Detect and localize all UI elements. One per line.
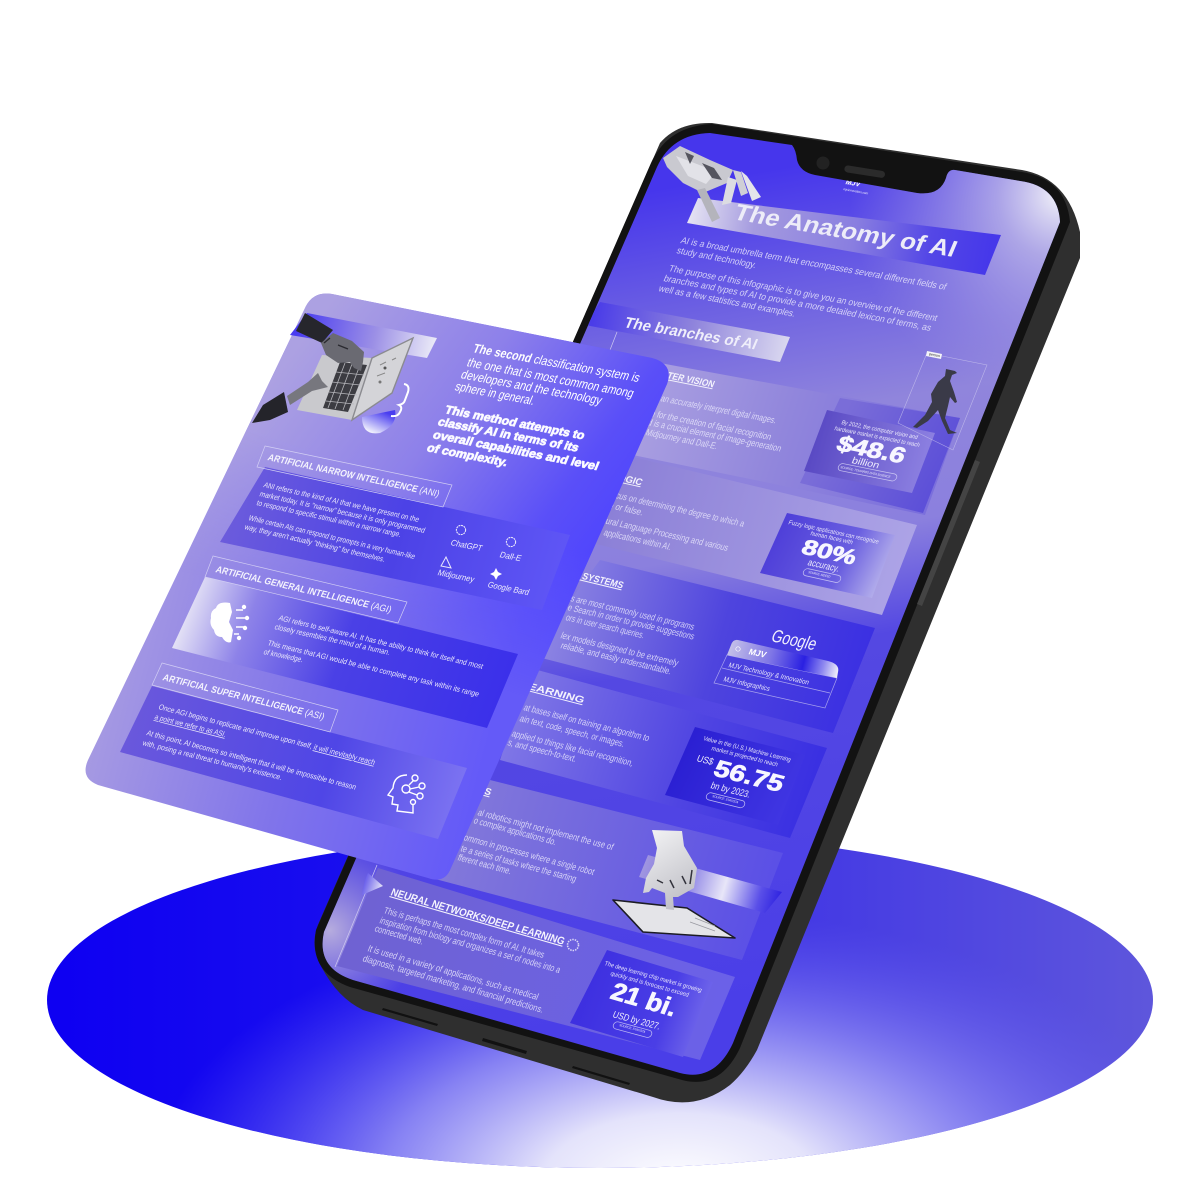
panel: machine learning: applied to things like facial recognition,: [510, 728, 635, 768]
panel: artificial general intelligence: [172, 556, 518, 728]
panel: artificial super intelligence: ARTIFICIAL SUPER INTELLIGENCE (ASI): [161, 672, 326, 723]
panel: expert systems: lex models designed to be extremely: [559, 630, 680, 668]
panel: computer vision: $48.6: [833, 431, 910, 468]
panel: machine learning: Value in the (U.S.) Machine Learning: [702, 735, 792, 764]
icon: Dall-E: Dall-E: [498, 549, 524, 563]
panel: computer vision: an accurately interpret digital images.: [659, 393, 778, 425]
panel: expert systems: [530, 560, 875, 733]
panel: machine learning: market is projected to reach: [710, 745, 780, 769]
panel: computer vision: hardware market is expected to reach: [833, 425, 921, 449]
laptop banner: [290, 313, 437, 358]
panel: fuzzy logic: applications within AI.: [602, 527, 673, 552]
icon: Midjourney: [436, 557, 477, 584]
logo under notch: [843, 180, 868, 194]
title banner: [687, 198, 1001, 275]
icon: brain circuit: [210, 603, 249, 642]
branches banner: The branches of AI: [621, 315, 760, 353]
branches banner: [585, 302, 790, 362]
intro text: [656, 235, 949, 333]
panel: neural networks: diagnosis, targeted marketing, and financial predictions.: [361, 953, 545, 1015]
panel: neural networks: NEURAL NETWORKS/DEEP LEARNING: [389, 887, 567, 948]
robot hand on tablet image: [613, 830, 735, 938]
panel: artificial general intelligence: of knowledge.: [262, 647, 305, 664]
panel: machine learning: [500, 668, 827, 838]
panel: neural networks: quickly and is forecast to exceed: [609, 970, 690, 999]
panel: neural networks: USD by 2027.: [611, 1009, 662, 1033]
panel: artificial narrow intelligence: [220, 446, 570, 610]
panel: classification card: [86, 294, 669, 880]
panel: robotics: ROBOTICS: [439, 774, 493, 798]
panel: neural networks: It is used in a variety of applications, such as medical: [366, 943, 540, 1002]
panel: artificial super intelligence: with, posing a real threat to humanity's existence.: [140, 738, 284, 782]
panel: fuzzy logic: SOURCE: INDEED: [808, 570, 832, 579]
phone body: [314, 123, 1080, 1102]
search widget: [714, 626, 838, 708]
side button: [917, 460, 980, 606]
person walking image: person: [929, 352, 940, 358]
icon: AI head: [388, 775, 425, 813]
icon: neural web: [568, 940, 578, 950]
card intro text: overall capabilities and level: [431, 429, 601, 473]
panel: neural networks: This is perhaps the most complex form of AI. It takes: [382, 905, 546, 960]
panel: fuzzy logic: cus on determining the degree to which a: [614, 490, 747, 529]
panel: artificial super intelligence: Once AGI begins to replicate and improve upon itself, it will inevitably reach: [157, 702, 377, 767]
panel: artificial narrow intelligence: ARTIFICIAL NARROW INTELLIGENCE (ANI): [266, 452, 441, 500]
panel: artificial narrow intelligence: ANI refers to the kind of AI that we have present on the: [262, 480, 421, 524]
panel: machine learning: SOURCE: STATISTA: [712, 794, 740, 805]
icon: ChatGPT: [449, 525, 484, 553]
panel: robotics: [420, 774, 783, 960]
panel: fuzzy logic: human faces with: [809, 530, 854, 546]
panel: machine learning: LEARNING: [519, 679, 586, 706]
panel: neural networks: SOURCE: STATISTA: [619, 1023, 647, 1034]
panel: artificial general intelligence: closely resembles the mind of a human.: [273, 622, 392, 657]
panel: artificial narrow intelligence: to respond to specific stimuli within a narrow range.: [255, 498, 403, 539]
panel: robotics: fferent each time.: [456, 852, 513, 876]
panel: neural networks: 21 bi.: [607, 978, 681, 1022]
logo under notch: mjvinnovation.com: [843, 187, 869, 195]
panel: computer vision: By 2022, the computer vision and: [840, 419, 919, 441]
search widget: MJV Infographics: [722, 676, 771, 693]
panel: robotics: ommon in processes where a single robot: [462, 832, 596, 877]
card intro text: developers and the technology: [459, 368, 605, 408]
panel: artificial super intelligence: a point we refer to as ASI.: [153, 712, 228, 739]
panel: robotics: al robotics might not implement the use of: [476, 807, 615, 852]
intro text: AI is a broad umbrella term that encompasses several different fields of: [679, 235, 949, 292]
panel: neural networks: connected web.: [373, 923, 425, 947]
card intro text: This method attempts to: [443, 404, 587, 442]
panel: neural networks: inspiration from biology and organizes a set of nodes into a: [378, 915, 563, 975]
panel: machine learning: ain text, code, speech, or images.: [518, 713, 626, 749]
icon: Google Bard: Google Bard: [486, 579, 531, 597]
title banner: The Anatomy of AI: [730, 199, 961, 262]
panel: fuzzy logic: accuracy.: [806, 557, 841, 575]
panel: artificial general intelligence: ARTIFICIAL GENERAL INTELLIGENCE (AGI): [214, 564, 393, 616]
panel: machine learning: 56.75: [710, 755, 788, 797]
card intro text: the one that is most common among: [465, 356, 636, 400]
panel: neural networks: [335, 865, 735, 1060]
panel: fuzzy logic: Fuzzy logic applications can recognize: [787, 519, 881, 546]
floor ellipse: [47, 832, 1153, 1168]
card intro text: The second classification system is: [471, 342, 642, 385]
icon: bracket blob: [362, 384, 408, 433]
person walking image: [898, 351, 987, 450]
phone bezel: [315, 124, 1070, 1082]
panel: computer vision: COMPUTER VISION: [635, 364, 716, 390]
icon: Dall-E: [498, 537, 524, 563]
panel: computer vision: SOURCE: TOWARDS DATA SCIENCE: [840, 465, 891, 479]
panel: fuzzy logic: e or false.: [607, 500, 645, 517]
panel: fuzzy logic: 80%: [798, 536, 860, 569]
search widget: Google: [768, 626, 820, 654]
panel: expert systems: EXPERT SYSTEMS: [544, 562, 625, 591]
panel: expert systems: ors in user search queries.: [564, 612, 646, 640]
phone screen: [300, 120, 1080, 1090]
card intro text: [425, 342, 642, 473]
panel: computer vision: e for the creation of facial recognition: [649, 408, 773, 442]
panel: fuzzy logic: FUZZY LOGIC: [579, 464, 644, 488]
panel: artificial narrow intelligence: While certain AIs can respond to prompts in a very human-like: [247, 513, 417, 561]
panel: robotics: o complex applications do.: [472, 815, 558, 847]
laptop with hands image: [252, 313, 413, 423]
panel: expert systems: s are most commonly used in programs: [569, 593, 696, 632]
panel: fuzzy logic: tural Language Processing and various: [602, 515, 730, 553]
panel: fuzzy logic: [604, 476, 917, 615]
panel: artificial narrow intelligence: market today. It is "narrow" because it is only programmed: [258, 489, 427, 535]
search widget: MJV: [747, 646, 769, 660]
phone: [300, 120, 1080, 1102]
panel: robotics: te a series of tasks where the starting: [459, 843, 578, 884]
card intro text: of complexity.: [425, 442, 510, 469]
panel: artificial narrow intelligence: way, they aren't actually "thinking" for themselves.: [242, 522, 387, 564]
icon: Midjourney: Midjourney: [436, 567, 477, 584]
panel: machine learning: s, and speech-to-text.: [506, 737, 578, 764]
card intro text: sphere in general.: [453, 380, 537, 408]
panel: artificial general intelligence: AGI refers to self-aware AI. It has the ability to think for itself and most: [277, 613, 486, 671]
panel: artificial super intelligence: [120, 663, 467, 839]
card background: [86, 294, 669, 880]
bottom speakers and port: [382, 1008, 630, 1085]
logo under notch: MJV: [844, 177, 862, 189]
panel: machine learning: bn by 2023.: [709, 780, 752, 801]
panel: computer vision: billion: [850, 455, 881, 471]
search widget: MJV Technology & Innovation: [727, 662, 810, 687]
intro text: branches and types of AI to provide a more detailed lexicon of terms, as: [662, 273, 934, 333]
intro text: The purpose of this infographic is to give you an overview of the different: [667, 263, 940, 323]
panel: computer vision: [636, 364, 960, 515]
panel: artificial super intelligence: At this point, AI becomes so intelligent that it will be impossible to reason: [145, 728, 358, 792]
card intro text: classify AI in terms of its: [436, 416, 581, 454]
panel: artificial general intelligence: This means that AGI would be able to complete any task within its range: [266, 638, 481, 699]
panel: expert systems: reliable, and easily understandable.: [559, 640, 673, 676]
icon: Google Bard: [486, 568, 531, 597]
intro text: study and technology.: [675, 245, 758, 270]
panel: machine learning: at bases itself on training an algorithm to: [522, 702, 651, 743]
panel: machine learning: US$: [695, 753, 716, 768]
panel: neural networks: The deep learning chip market is growing: [603, 960, 703, 994]
intro text: well as a few statistics and examples.: [656, 283, 797, 319]
notch camera and speaker: [816, 156, 885, 178]
icon: triangle marker: [362, 873, 383, 895]
panel: expert systems: e Search in order to provide suggestions: [566, 602, 696, 642]
icon: ChatGPT: ChatGPT: [449, 537, 484, 553]
panel: computer vision: Midjourney and Dall-E.: [644, 427, 719, 451]
panel: computer vision: d is a crucial element of image-generation: [646, 417, 783, 453]
robot hand image: [663, 146, 761, 222]
